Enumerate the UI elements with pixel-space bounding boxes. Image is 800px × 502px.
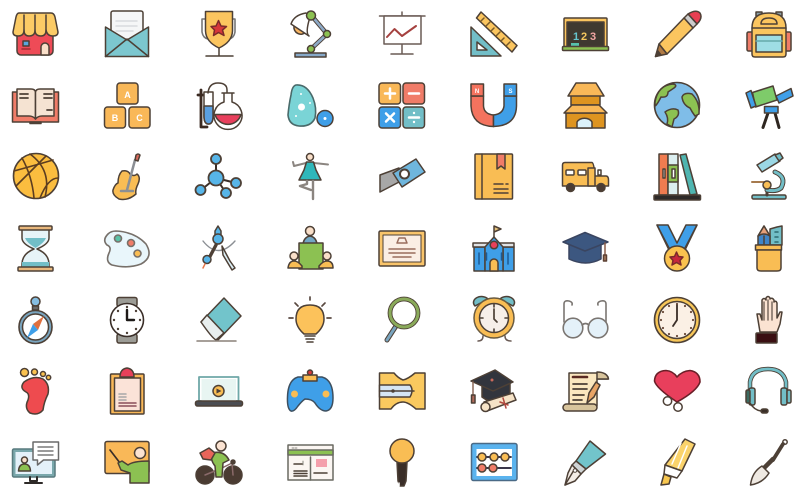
icon: envelope with letter <box>106 11 148 56</box>
icon: cyclist <box>196 441 242 484</box>
icon: teacher at board <box>105 442 149 483</box>
icon: chalkboard: 2 <box>581 31 587 43</box>
icon: trophy <box>202 12 235 56</box>
icon: video chat monitor <box>12 442 58 483</box>
icon: certificate <box>379 231 425 266</box>
icon: raised hand <box>756 296 782 343</box>
icon: footprint <box>20 368 51 414</box>
icon: chalkboard: 1 <box>573 31 579 43</box>
icon: abacus <box>472 444 517 480</box>
icon: group meeting <box>288 226 333 269</box>
icon: molecule <box>196 154 241 198</box>
icon: telescope <box>746 86 793 128</box>
icon: highlighter <box>661 439 695 485</box>
icon: headset <box>746 369 791 413</box>
icon: chalkboard: 3 <box>590 31 596 43</box>
icon: alarm clock <box>473 296 515 341</box>
icon: desk lamp <box>291 11 330 57</box>
icon: medal <box>657 225 697 271</box>
icon: magnifying glass <box>387 299 418 340</box>
icon: books on shelf <box>654 154 700 200</box>
icon: drawing compass <box>203 226 235 270</box>
icon: alphabet blocks: A <box>124 90 131 100</box>
icon: cell <box>288 85 333 126</box>
icon: guitar <box>113 154 140 199</box>
icon: pocket compass <box>19 297 52 344</box>
icon: microscope <box>752 153 786 199</box>
icon: paint brush <box>750 440 787 485</box>
icon: horseshoe magnet <box>471 84 516 126</box>
icon: wristwatch <box>110 298 144 343</box>
icon: hourglass <box>18 226 53 271</box>
icon: alphabet blocks: B <box>112 113 119 123</box>
icon: pencil cup <box>756 226 782 271</box>
icon: pagoda <box>564 83 607 128</box>
icon: school bus <box>562 162 608 192</box>
icon: mortarboard <box>563 232 608 263</box>
icon: presentation board <box>380 12 425 54</box>
icon: alphabet blocks: C <box>136 113 143 123</box>
icon: scroll with quill <box>563 372 608 411</box>
icon: open book <box>12 89 58 124</box>
icon: globe <box>654 82 700 128</box>
icon: alphabet blocks <box>104 83 150 128</box>
icon: graduation cap and diploma <box>471 370 516 412</box>
icon: pencil <box>656 11 701 57</box>
icon: basketball <box>14 154 58 198</box>
icon: pencil sharpener <box>380 373 425 409</box>
icon: fountain pen <box>565 441 606 485</box>
icon: ballerina <box>293 154 328 199</box>
icon: clipboard <box>110 368 144 414</box>
icon: open web page <box>288 445 333 480</box>
icon: wall clock <box>654 298 700 342</box>
icon: horseshoe magnet: S <box>508 89 513 95</box>
icon: school building <box>473 226 514 271</box>
icon: chalkboard <box>562 18 608 50</box>
icon: chemistry flask <box>198 83 242 129</box>
icon: paint palette <box>105 231 149 267</box>
icon: calculator keys <box>379 83 424 128</box>
icon: backpack <box>747 12 791 57</box>
icon: horseshoe magnet: N <box>475 89 479 95</box>
icon: eraser <box>197 298 241 341</box>
icon: craft knife <box>380 159 425 192</box>
icon: closed book <box>475 154 512 199</box>
icon: glasses <box>563 301 608 338</box>
icon: game controller <box>287 370 333 411</box>
icon: store <box>13 13 58 55</box>
icon: light bulb <box>289 297 331 342</box>
icon: light bulb microphone <box>390 439 414 486</box>
icon: laptop with video <box>196 377 242 406</box>
icon: heart with beads <box>654 370 700 411</box>
icon: ruler and set square <box>471 12 517 56</box>
